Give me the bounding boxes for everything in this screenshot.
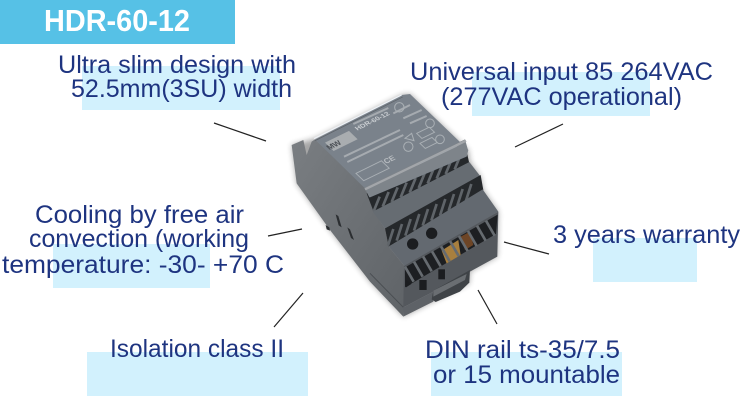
feature: isolation class: Isolation class II: [110, 335, 284, 363]
feature: slim design: Ultra slim design with: [58, 51, 296, 79]
feature: DIN rail: DIN rail ts-35/7.5: [425, 336, 620, 364]
feature: cooling: convection (working: [29, 225, 249, 253]
feature: universal input: Universal input 85 264VAC: [410, 58, 713, 86]
feature: universal input: [410, 58, 713, 116]
front notches: [419, 280, 427, 290]
feature: DIN rail: [425, 336, 622, 396]
ventilation row 2: [385, 175, 483, 247]
front face: [403, 212, 498, 307]
front vents with copper: [405, 215, 498, 287]
feature: warranty: 3 years warranty: [553, 221, 740, 249]
feature: DIN rail: or 15 mountable: [433, 361, 620, 389]
feature: isolation class: [87, 335, 308, 396]
step face 3: [389, 189, 498, 267]
product photo: power supply: [292, 94, 498, 317]
label face: MW: [324, 139, 344, 151]
pointer lines: [214, 123, 563, 327]
feature: warranty: [553, 221, 740, 282]
label face: CE: [382, 154, 397, 166]
title banner: [0, 0, 235, 44]
feature: slim design: 52.5mm(3SU) width: [71, 75, 292, 103]
side clips: [336, 214, 342, 227]
din rail clip: [432, 270, 470, 302]
feature: cooling: [2, 201, 284, 288]
ventilation row 1: [367, 152, 469, 213]
feature: cooling: Cooling by free air: [35, 201, 244, 229]
label face: [314, 94, 468, 197]
step face 2: [373, 162, 481, 228]
title banner: HDR-60-12: [44, 3, 190, 38]
holes: [407, 238, 418, 250]
feature: universal input: (277VAC operational): [441, 83, 682, 111]
feature: slim design: [58, 51, 296, 110]
feature: cooling: temperature: -30- +70 C: [2, 251, 284, 279]
label: rating marks: [356, 103, 444, 181]
base lip: [403, 292, 433, 317]
label: model name: HDR-60-12: [354, 111, 392, 132]
label: MW logo: [325, 131, 358, 151]
